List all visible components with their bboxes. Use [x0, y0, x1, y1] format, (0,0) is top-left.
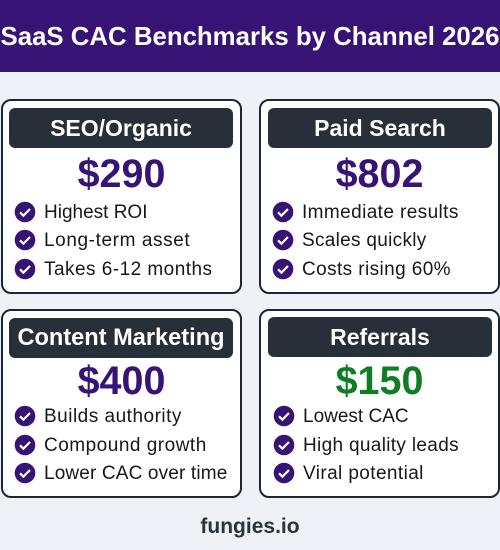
heading: Paid Search [268, 108, 492, 148]
list item: Long-term asset: Long-term asset [44, 230, 190, 251]
list item: Scales quickly: Scales quickly [302, 230, 427, 251]
title: SaaS CAC Benchmarks by Channel 2026 [1, 23, 499, 51]
panel: Paid Search [259, 99, 500, 294]
heading: SEO/Organic: SEO/Organic [50, 115, 192, 141]
heading: Content Marketing: Content Marketing [17, 325, 225, 351]
price: $400: $400 [78, 359, 165, 403]
list item: Costs rising 60%: Costs rising 60% [302, 259, 451, 280]
list item: Builds authority: Builds authority [44, 406, 182, 427]
list item: Immediate results: Immediate results [302, 202, 459, 223]
list item: Takes 6-12 months: Takes 6-12 months [44, 259, 213, 280]
footer brand: fungies.io [200, 515, 300, 538]
heading: Referrals: Referrals [330, 324, 430, 350]
list item: High quality leads: High quality leads [303, 435, 459, 456]
price: $290: $290 [78, 152, 165, 196]
heading: SEO/Organic [9, 108, 233, 148]
title banner [0, 0, 500, 72]
list item: Viral potential: Viral potential [303, 463, 424, 484]
heading: Paid Search: Paid Search [314, 115, 446, 141]
panel: Content Marketing [1, 309, 242, 498]
heading: Content Marketing [9, 318, 233, 358]
panel: Referrals [259, 309, 500, 498]
price: $802: $802 [336, 152, 423, 196]
heading: Referrals [268, 317, 492, 357]
list item: Lowest CAC: Lowest CAC [303, 406, 409, 427]
price: $150: $150 [336, 359, 423, 403]
list item: Highest ROI: Highest ROI [44, 202, 147, 223]
list item: Lower CAC over time: Lower CAC over time [44, 463, 227, 484]
list item: Compound growth: Compound growth [44, 435, 207, 456]
panel: SEO/Organic [1, 99, 242, 294]
